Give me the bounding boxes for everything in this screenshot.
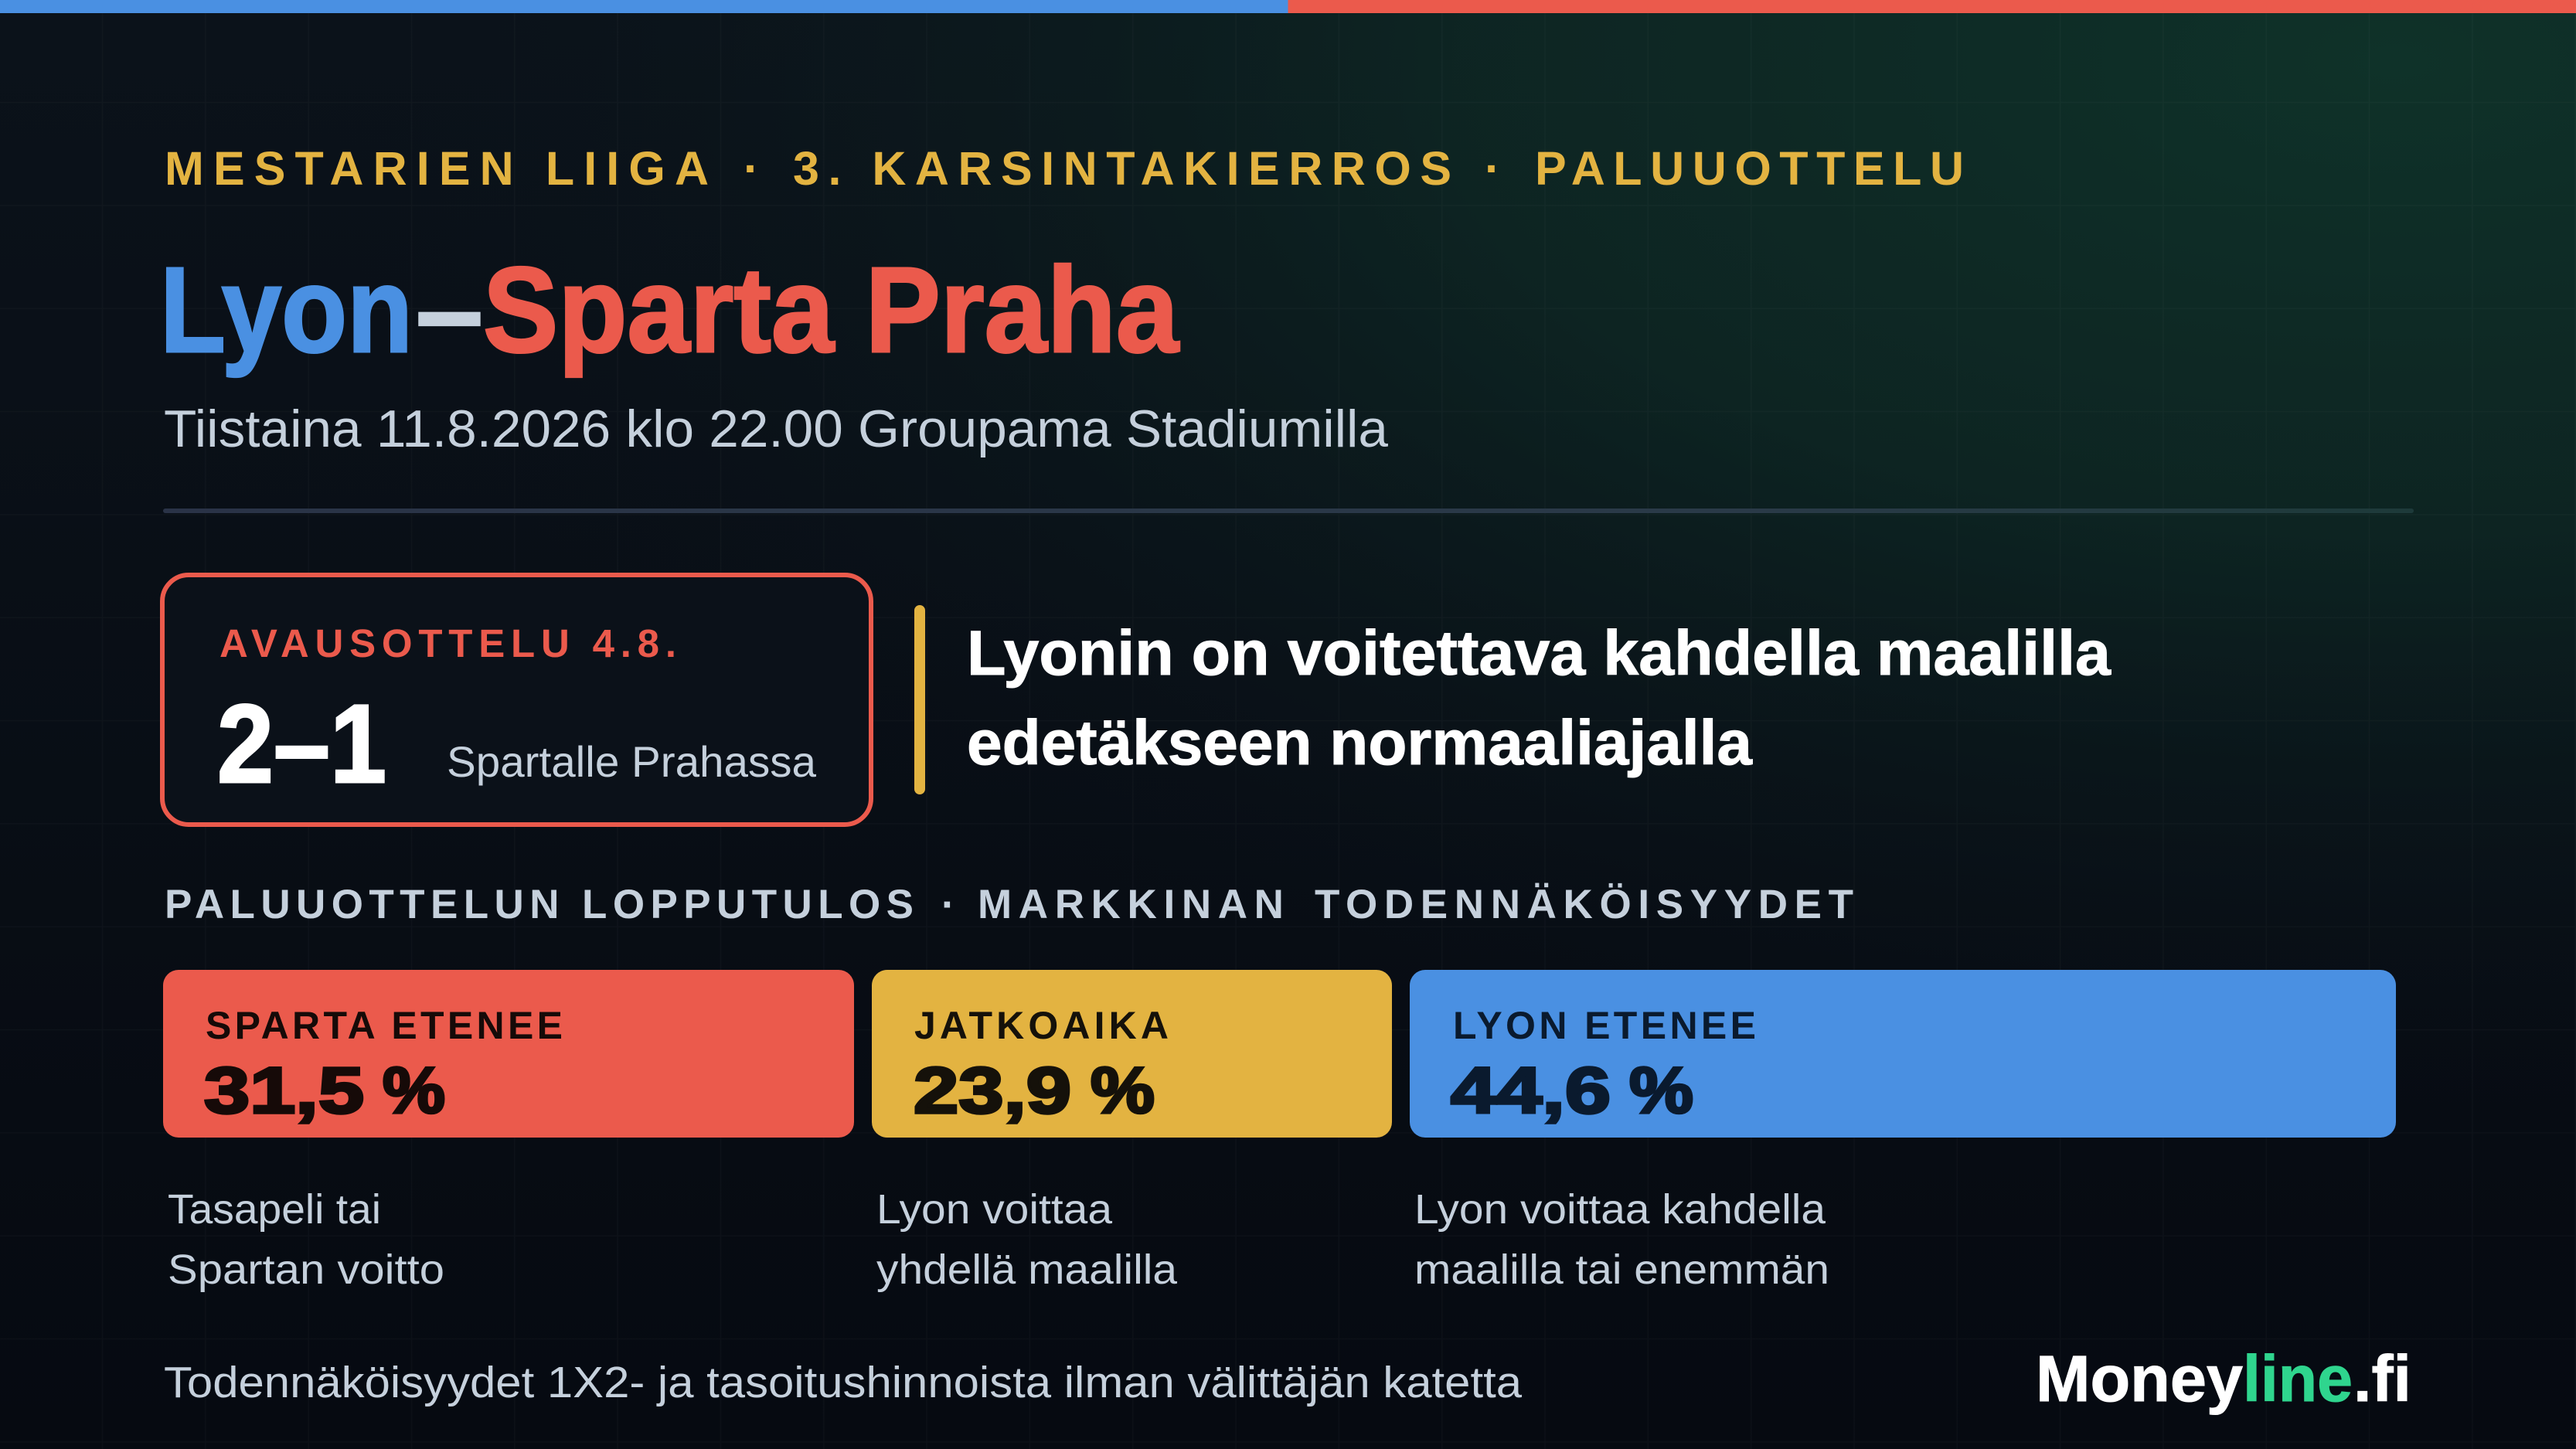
key message: edetäkseen normaaliajalla bbox=[967, 708, 1753, 778]
match date and venue: Tiistaina 11.8.2026 klo 22.00 Groupama Stadiumilla bbox=[164, 400, 1388, 458]
caption: Lyon: Lyon voittaa kahdella bbox=[1414, 1186, 1826, 1233]
brand logo: .fi bbox=[2353, 1342, 2411, 1415]
stacked probability bar: Lyon: % bbox=[1629, 1054, 1693, 1127]
eyebrow heading: PALUUOTTELU bbox=[1535, 142, 1964, 195]
stacked probability bar: Sparta: SPARTA ETENEE bbox=[206, 1004, 563, 1047]
stacked probability bar: extra time bbox=[872, 970, 1392, 1138]
brand logo: line bbox=[2243, 1342, 2353, 1415]
title: Sparta Praha bbox=[483, 243, 1180, 378]
top colour bar bbox=[0, 0, 2576, 13]
title: Lyon bbox=[160, 243, 413, 378]
title bbox=[160, 243, 1180, 378]
first leg note: Spartalle Prahassa bbox=[447, 737, 817, 786]
brand logo bbox=[2036, 1342, 2411, 1415]
caption: Sparta: Tasapeli tai bbox=[168, 1186, 381, 1233]
caption: extra time: yhdellä maalilla bbox=[876, 1247, 1178, 1293]
panel: first leg score bbox=[162, 575, 871, 825]
caption: extra time: Lyon voittaa bbox=[876, 1186, 1113, 1233]
brand logo: Money bbox=[2036, 1342, 2243, 1415]
eyebrow heading: 3. KARSINTAKIERROS bbox=[793, 142, 1451, 195]
eyebrow heading: · bbox=[1485, 142, 1500, 195]
eyebrow heading bbox=[165, 142, 1964, 195]
eyebrow heading: · bbox=[744, 142, 759, 195]
first leg label: AVAUSOTTELU 4.8. bbox=[219, 621, 676, 665]
title: – bbox=[416, 243, 483, 378]
caption: Sparta: Spartan voitto bbox=[168, 1247, 444, 1293]
caption: extra time bbox=[876, 1186, 1178, 1293]
stacked probability bar: Lyon bbox=[1410, 970, 2396, 1138]
first leg score: 2–1 bbox=[217, 682, 386, 806]
stacked probability bar: extra time: % bbox=[1091, 1054, 1155, 1127]
section heading: MARKKINAN TODENNÄKÖISYYDET bbox=[978, 882, 1853, 927]
stacked probability bar: Lyon: 44,6 bbox=[1451, 1054, 1611, 1127]
eyebrow heading: MESTARIEN LIIGA bbox=[165, 142, 709, 195]
stacked probability bar: Lyon: LYON ETENEE bbox=[1453, 1004, 1756, 1047]
stacked probability bar: Sparta bbox=[163, 970, 854, 1138]
stacked probability bar: extra time: JATKOAIKA bbox=[914, 1004, 1169, 1047]
caption: Lyon: maalilla tai enemmän bbox=[1414, 1247, 1829, 1293]
caption: Sparta bbox=[168, 1186, 444, 1293]
stacked probability bar: Sparta: 31,5 bbox=[204, 1054, 364, 1127]
caption: Lyon bbox=[1414, 1186, 1829, 1293]
stacked probability bar: Sparta: % bbox=[383, 1054, 445, 1127]
section heading bbox=[165, 882, 1853, 927]
section heading: · bbox=[941, 882, 955, 927]
section heading: PALUUOTTELUN LOPPUTULOS bbox=[165, 882, 914, 927]
key message bbox=[914, 605, 2112, 794]
stacked probability bar: extra time: 23,9 bbox=[914, 1054, 1071, 1127]
key message: Lyonin on voitettava kahdella maalilla bbox=[967, 618, 2112, 689]
footnote: Todennäköisyydet 1X2- ja tasoitushinnoista ilman välittäjän katetta bbox=[164, 1358, 1522, 1407]
